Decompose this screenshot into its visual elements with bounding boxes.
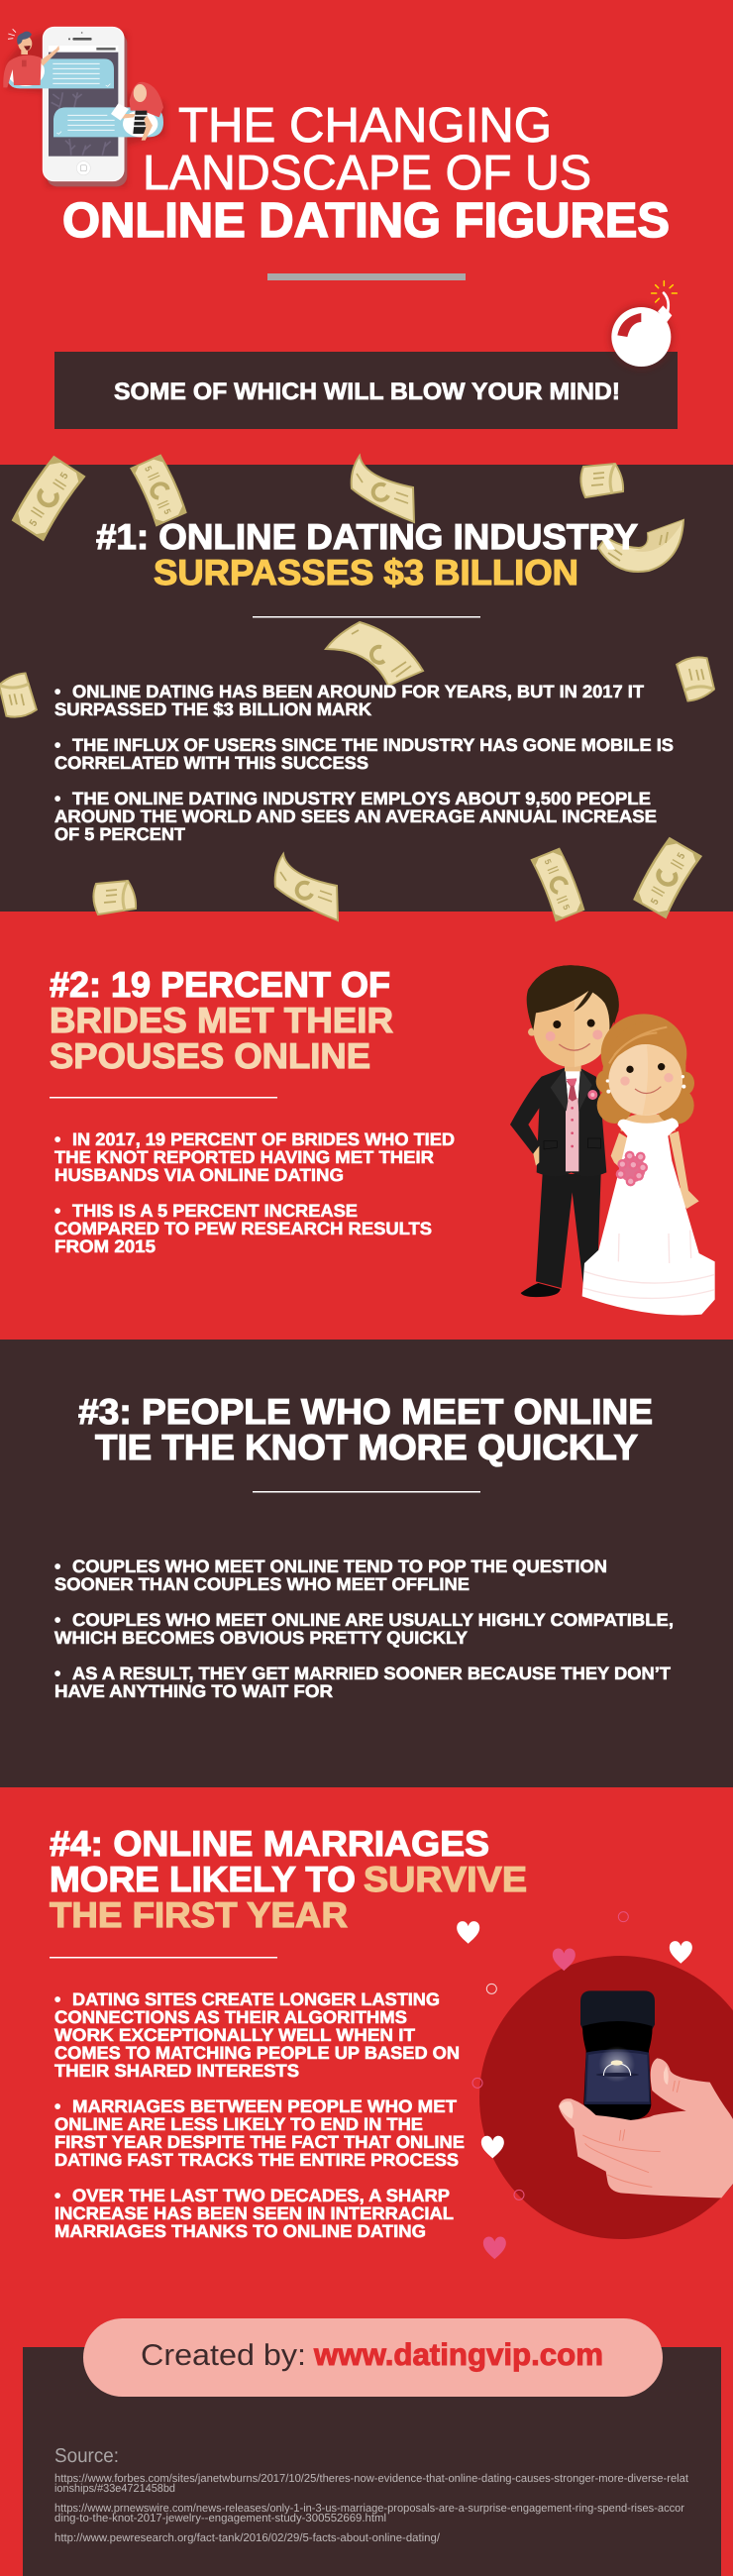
credit pill: Created by: bbox=[141, 2339, 306, 2372]
panel: finding 2 bbox=[50, 964, 715, 1316]
credit pill: www.datingvip.com bbox=[313, 2337, 603, 2372]
bullet list: INCREASE HAS BEEN SEEN IN INTERRACIAL bbox=[54, 2203, 454, 2223]
bullet list: CONNECTIONS AS THEIR ALGORITHMS bbox=[54, 2007, 407, 2027]
bullet list: • bbox=[54, 2096, 60, 2116]
illustration: bride and groom bbox=[510, 965, 715, 1316]
bullet list: AROUND THE WORLD AND SEES AN AVERAGE ANNUAL INCREASE bbox=[54, 806, 657, 826]
bullet list: SOONER THAN COUPLES WHO MEET OFFLINE bbox=[54, 1574, 470, 1594]
bullet list: WHICH BECOMES OBVIOUS PRETTY QUICKLY bbox=[54, 1628, 468, 1648]
credit pill bbox=[83, 2318, 663, 2397]
bullet list: ONLINE ARE LESS LIKELY TO END IN THE bbox=[54, 2114, 423, 2134]
bullet list: • bbox=[54, 1664, 60, 1683]
heading bbox=[50, 964, 393, 1076]
heading: #3: PEOPLE WHO MEET ONLINE bbox=[78, 1391, 653, 1432]
heading bbox=[96, 516, 638, 592]
bullet list: MARRIAGES THANKS TO ONLINE DATING bbox=[54, 2221, 426, 2241]
subtitle banner: SOME OF WHICH WILL BLOW YOUR MIND! bbox=[114, 378, 620, 405]
bullet list: FIRST YEAR DESPITE THE FACT THAT ONLINE bbox=[54, 2132, 465, 2152]
bullet list: THE KNOT REPORTED HAVING MET THEIR bbox=[54, 1147, 434, 1167]
bullet list: CORRELATED WITH THIS SUCCESS bbox=[54, 753, 368, 773]
bullet list: OVER THE LAST TWO DECADES, A SHARP bbox=[72, 2186, 450, 2205]
source list: https://www.prnewswire.com/news-releases/only-1-in-3-us-marriage-proposals-are-a-surprise-engagement-ring-spend-rises-accor bbox=[54, 2503, 684, 2515]
title: THE CHANGING bbox=[178, 98, 552, 153]
heading bbox=[78, 1391, 653, 1467]
heading: BRIDES MET THEIR bbox=[50, 1000, 393, 1040]
bullet list: COUPLES WHO MEET ONLINE ARE USUALLY HIGHLY COMPATIBLE, bbox=[72, 1610, 674, 1630]
bullet list: • bbox=[54, 1610, 60, 1630]
bullet list: OF 5 PERCENT bbox=[54, 824, 185, 844]
heading: #2: 19 PERCENT OF bbox=[50, 964, 390, 1005]
falling money bills: 5 bbox=[561, 903, 572, 912]
bullet list: • bbox=[54, 1201, 60, 1221]
falling money bills: 5 bbox=[543, 858, 554, 866]
heading bbox=[50, 1823, 527, 1935]
falling money bills: 5 bbox=[143, 465, 155, 473]
falling money bills bbox=[0, 455, 715, 920]
bullet list: AS A RESULT, THEY GET MARRIED SOONER BECAUSE THEY DON’T bbox=[72, 1664, 671, 1683]
panel: finding 3 bbox=[0, 1340, 733, 1787]
falling money bills: 5 bbox=[648, 897, 661, 907]
illustration: phone chat bbox=[3, 27, 165, 186]
bullet list: • bbox=[54, 1989, 60, 2009]
title divider bar bbox=[267, 273, 466, 280]
heading: SURVIVE bbox=[364, 1859, 527, 1899]
bullet list: WORK EXCEPTIONALLY WELL WHEN IT bbox=[54, 2025, 415, 2045]
bullet list: • bbox=[54, 682, 60, 701]
bullet list: MARRIAGES BETWEEN PEOPLE WHO MET bbox=[72, 2096, 457, 2116]
bullet list: SURPASSED THE $3 BILLION MARK bbox=[54, 699, 371, 719]
bullet list: HUSBANDS VIA ONLINE DATING bbox=[54, 1165, 344, 1185]
heading: SURPASSES $3 BILLION bbox=[154, 552, 578, 592]
icon: bomb bbox=[608, 281, 677, 370]
bullet list: COUPLES WHO MEET ONLINE TEND TO POP THE QUESTION bbox=[72, 1556, 607, 1576]
bullet list: HAVE ANYTHING TO WAIT FOR bbox=[54, 1681, 333, 1701]
subtitle banner bbox=[54, 352, 678, 429]
heading: SPOUSES ONLINE bbox=[50, 1035, 370, 1076]
bullet list: ONLINE DATING HAS BEEN AROUND FOR YEARS, BUT IN 2017 IT bbox=[72, 682, 644, 701]
bullet list: • bbox=[54, 1129, 60, 1149]
bullet list: • bbox=[54, 735, 60, 755]
bullet list: DATING FAST TRACKS THE ENTIRE PROCESS bbox=[54, 2150, 459, 2170]
heading: TIE THE KNOT MORE QUICKLY bbox=[95, 1427, 638, 1467]
source list: ding-to-the-knot-2017-jewelry--engagement-study-300552669.html bbox=[54, 2513, 386, 2524]
bullet list: IN 2017, 19 PERCENT OF BRIDES WHO TIED bbox=[72, 1129, 455, 1149]
bullet list bbox=[54, 1556, 674, 1701]
bullet list bbox=[54, 682, 674, 844]
panel: footer sources bbox=[23, 2318, 721, 2576]
bullet list: COMES TO MATCHING PEOPLE UP BASED ON bbox=[54, 2043, 460, 2063]
bullet list: DATING SITES CREATE LONGER LASTING bbox=[72, 1989, 440, 2009]
title: LANDSCAPE OF US bbox=[143, 146, 591, 200]
bullet list: THEIR SHARED INTERESTS bbox=[54, 2061, 299, 2081]
falling money bills: 5 bbox=[27, 517, 40, 528]
panel: finding 4 bbox=[50, 1823, 733, 2259]
heading: #4: ONLINE MARRIAGES bbox=[50, 1823, 489, 1864]
title: ONLINE DATING FIGURES bbox=[62, 193, 670, 248]
bullet list: THE INFLUX OF USERS SINCE THE INDUSTRY HAS GONE MOBILE IS bbox=[72, 735, 674, 755]
source list: ionships/#33e4721458bd bbox=[54, 2483, 175, 2495]
bullet list: • bbox=[54, 1556, 60, 1576]
heading: THE FIRST YEAR bbox=[50, 1894, 348, 1935]
title bbox=[62, 98, 670, 248]
bullet list: • bbox=[54, 2186, 60, 2205]
bullet list bbox=[54, 1129, 455, 1256]
falling money bills: 5 bbox=[675, 850, 687, 861]
source list: Source: bbox=[54, 2445, 119, 2467]
bullet list: FROM 2015 bbox=[54, 1236, 156, 1256]
source list bbox=[54, 2445, 689, 2544]
bullet list: • bbox=[54, 789, 60, 808]
bullet list bbox=[54, 1989, 465, 2241]
illustration: ring box in hand bbox=[457, 1912, 733, 2259]
heading: MORE LIKELY TO bbox=[50, 1859, 356, 1899]
falling money bills: 5 bbox=[57, 470, 70, 482]
source list: https://www.forbes.com/sites/janetwburns/2017/10/25/theres-now-evidence-that-online-dating-causes-stronger-more-diverse-relat bbox=[54, 2473, 689, 2485]
bullet list: THIS IS A 5 PERCENT INCREASE bbox=[72, 1201, 358, 1221]
panel: finding 1 bbox=[0, 455, 733, 920]
bullet list: THE ONLINE DATING INDUSTRY EMPLOYS ABOUT 9,500 PEOPLE bbox=[72, 789, 651, 808]
heading: #1: ONLINE DATING INDUSTRY bbox=[96, 516, 638, 557]
falling money bills: 5 bbox=[161, 507, 173, 516]
source list: http://www.pewresearch.org/fact-tank/2016/02/29/5-facts-about-online-dating/ bbox=[54, 2532, 441, 2544]
bullet list: COMPARED TO PEW RESEARCH RESULTS bbox=[54, 1219, 432, 1238]
